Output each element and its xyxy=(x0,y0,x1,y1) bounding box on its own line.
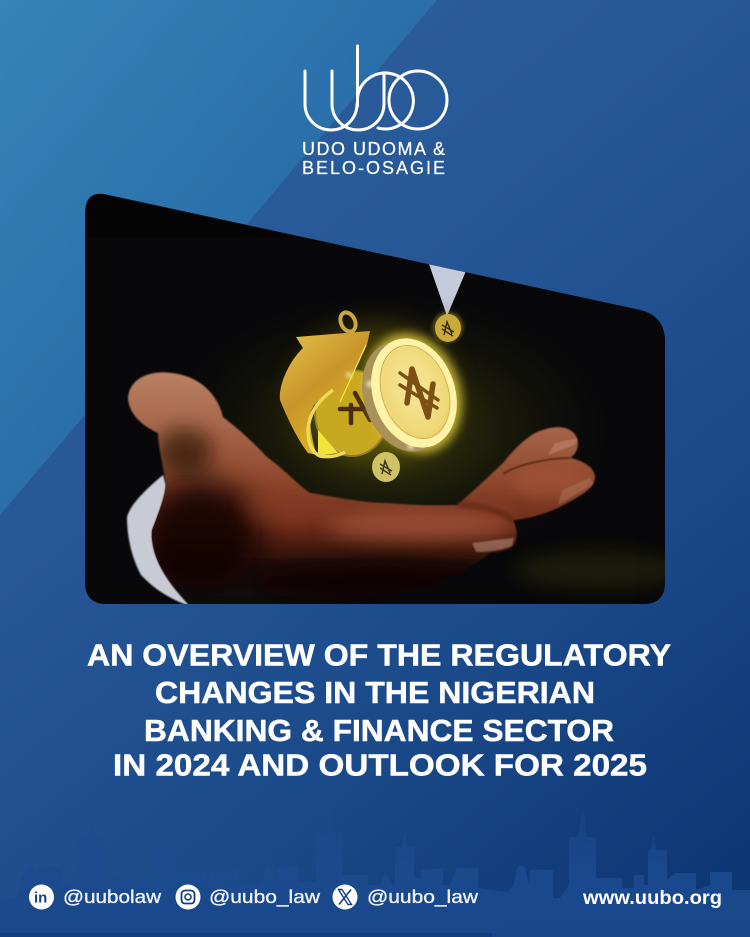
social: instagram: @uubo_law xyxy=(209,887,321,908)
social: linkedin xyxy=(29,884,162,910)
title: CHANGES IN THE NIGERIAN xyxy=(155,675,595,710)
social: instagram xyxy=(176,884,321,910)
website: www.uubo.org xyxy=(582,888,722,909)
hand xyxy=(128,372,595,606)
logo mark xyxy=(305,46,447,130)
icon: naira sign xyxy=(400,369,438,417)
social: linkedin: @uubolaw xyxy=(63,887,162,907)
logo xyxy=(302,46,447,178)
title: AN OVERVIEW OF THE REGULATORY xyxy=(87,638,671,672)
social: x xyxy=(332,884,479,910)
social: linkedin: in xyxy=(34,890,47,906)
coin: main naira xyxy=(360,326,469,460)
photo panel: hand with floating naira coins xyxy=(85,190,685,607)
coin: small lower xyxy=(372,452,400,482)
shirt cuff xyxy=(127,475,190,606)
logo wordmark: UDO UDOMA & xyxy=(302,139,445,159)
city skyline silhouette xyxy=(0,807,750,937)
shirt collar xyxy=(429,264,466,316)
coin: small upper right xyxy=(433,312,463,342)
coin: back xyxy=(315,370,389,456)
title xyxy=(87,638,671,782)
title: BANKING & FINANCE SECTOR xyxy=(144,713,614,748)
social: x: @uubo_law xyxy=(367,887,479,908)
sparkles xyxy=(346,372,414,449)
icon: golden arrow xyxy=(280,331,370,457)
logo wordmark: BELO-OSAGIE xyxy=(302,158,445,178)
coin glow backdrop xyxy=(234,302,546,505)
title: IN 2024 AND OUTLOOK FOR 2025 xyxy=(113,748,647,782)
coin glow xyxy=(295,324,455,460)
coin: top small hidden xyxy=(337,310,359,334)
logo wordmark xyxy=(302,139,445,178)
